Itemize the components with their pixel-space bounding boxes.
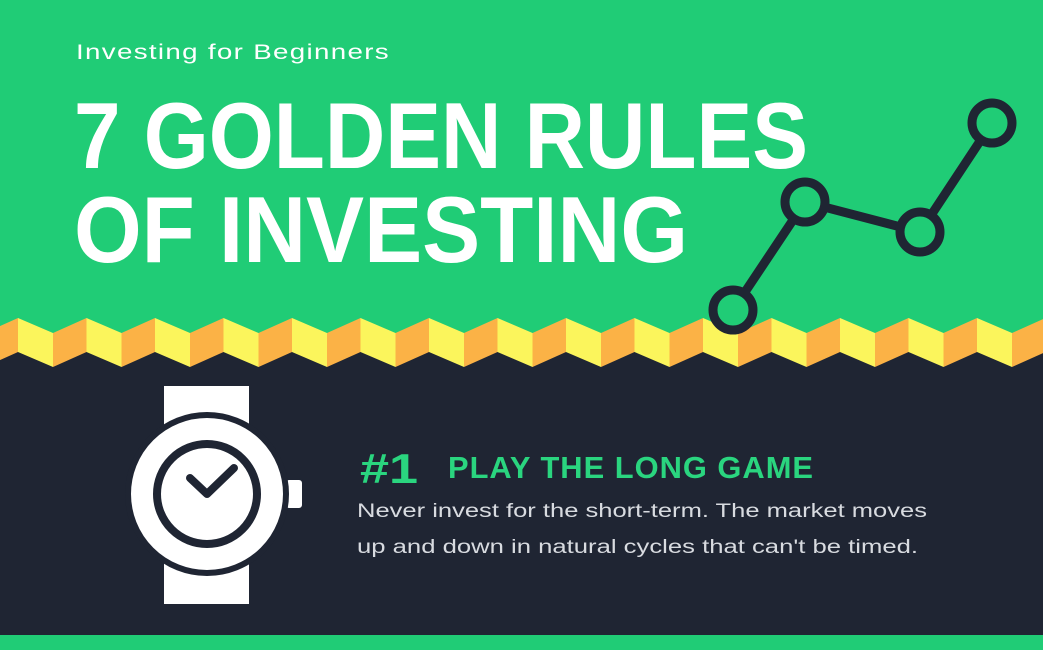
rule text: up and down in natural cycles that can't be timed. <box>357 537 918 558</box>
title: 7 GOLDEN RULES <box>74 83 808 188</box>
rule text: Never invest for the short-term. The market moves <box>357 501 927 522</box>
line chart icon <box>713 103 1012 330</box>
title <box>74 83 808 282</box>
rule text <box>357 501 927 558</box>
rule heading: PLAY THE LONG GAME <box>448 450 814 485</box>
title: OF INVESTING <box>74 177 688 282</box>
rule heading: #1 <box>360 445 418 492</box>
subtitle: Investing for Beginners <box>76 41 390 64</box>
zigzag band <box>0 318 1043 367</box>
icon: watch <box>128 385 303 605</box>
rule heading <box>360 445 814 492</box>
